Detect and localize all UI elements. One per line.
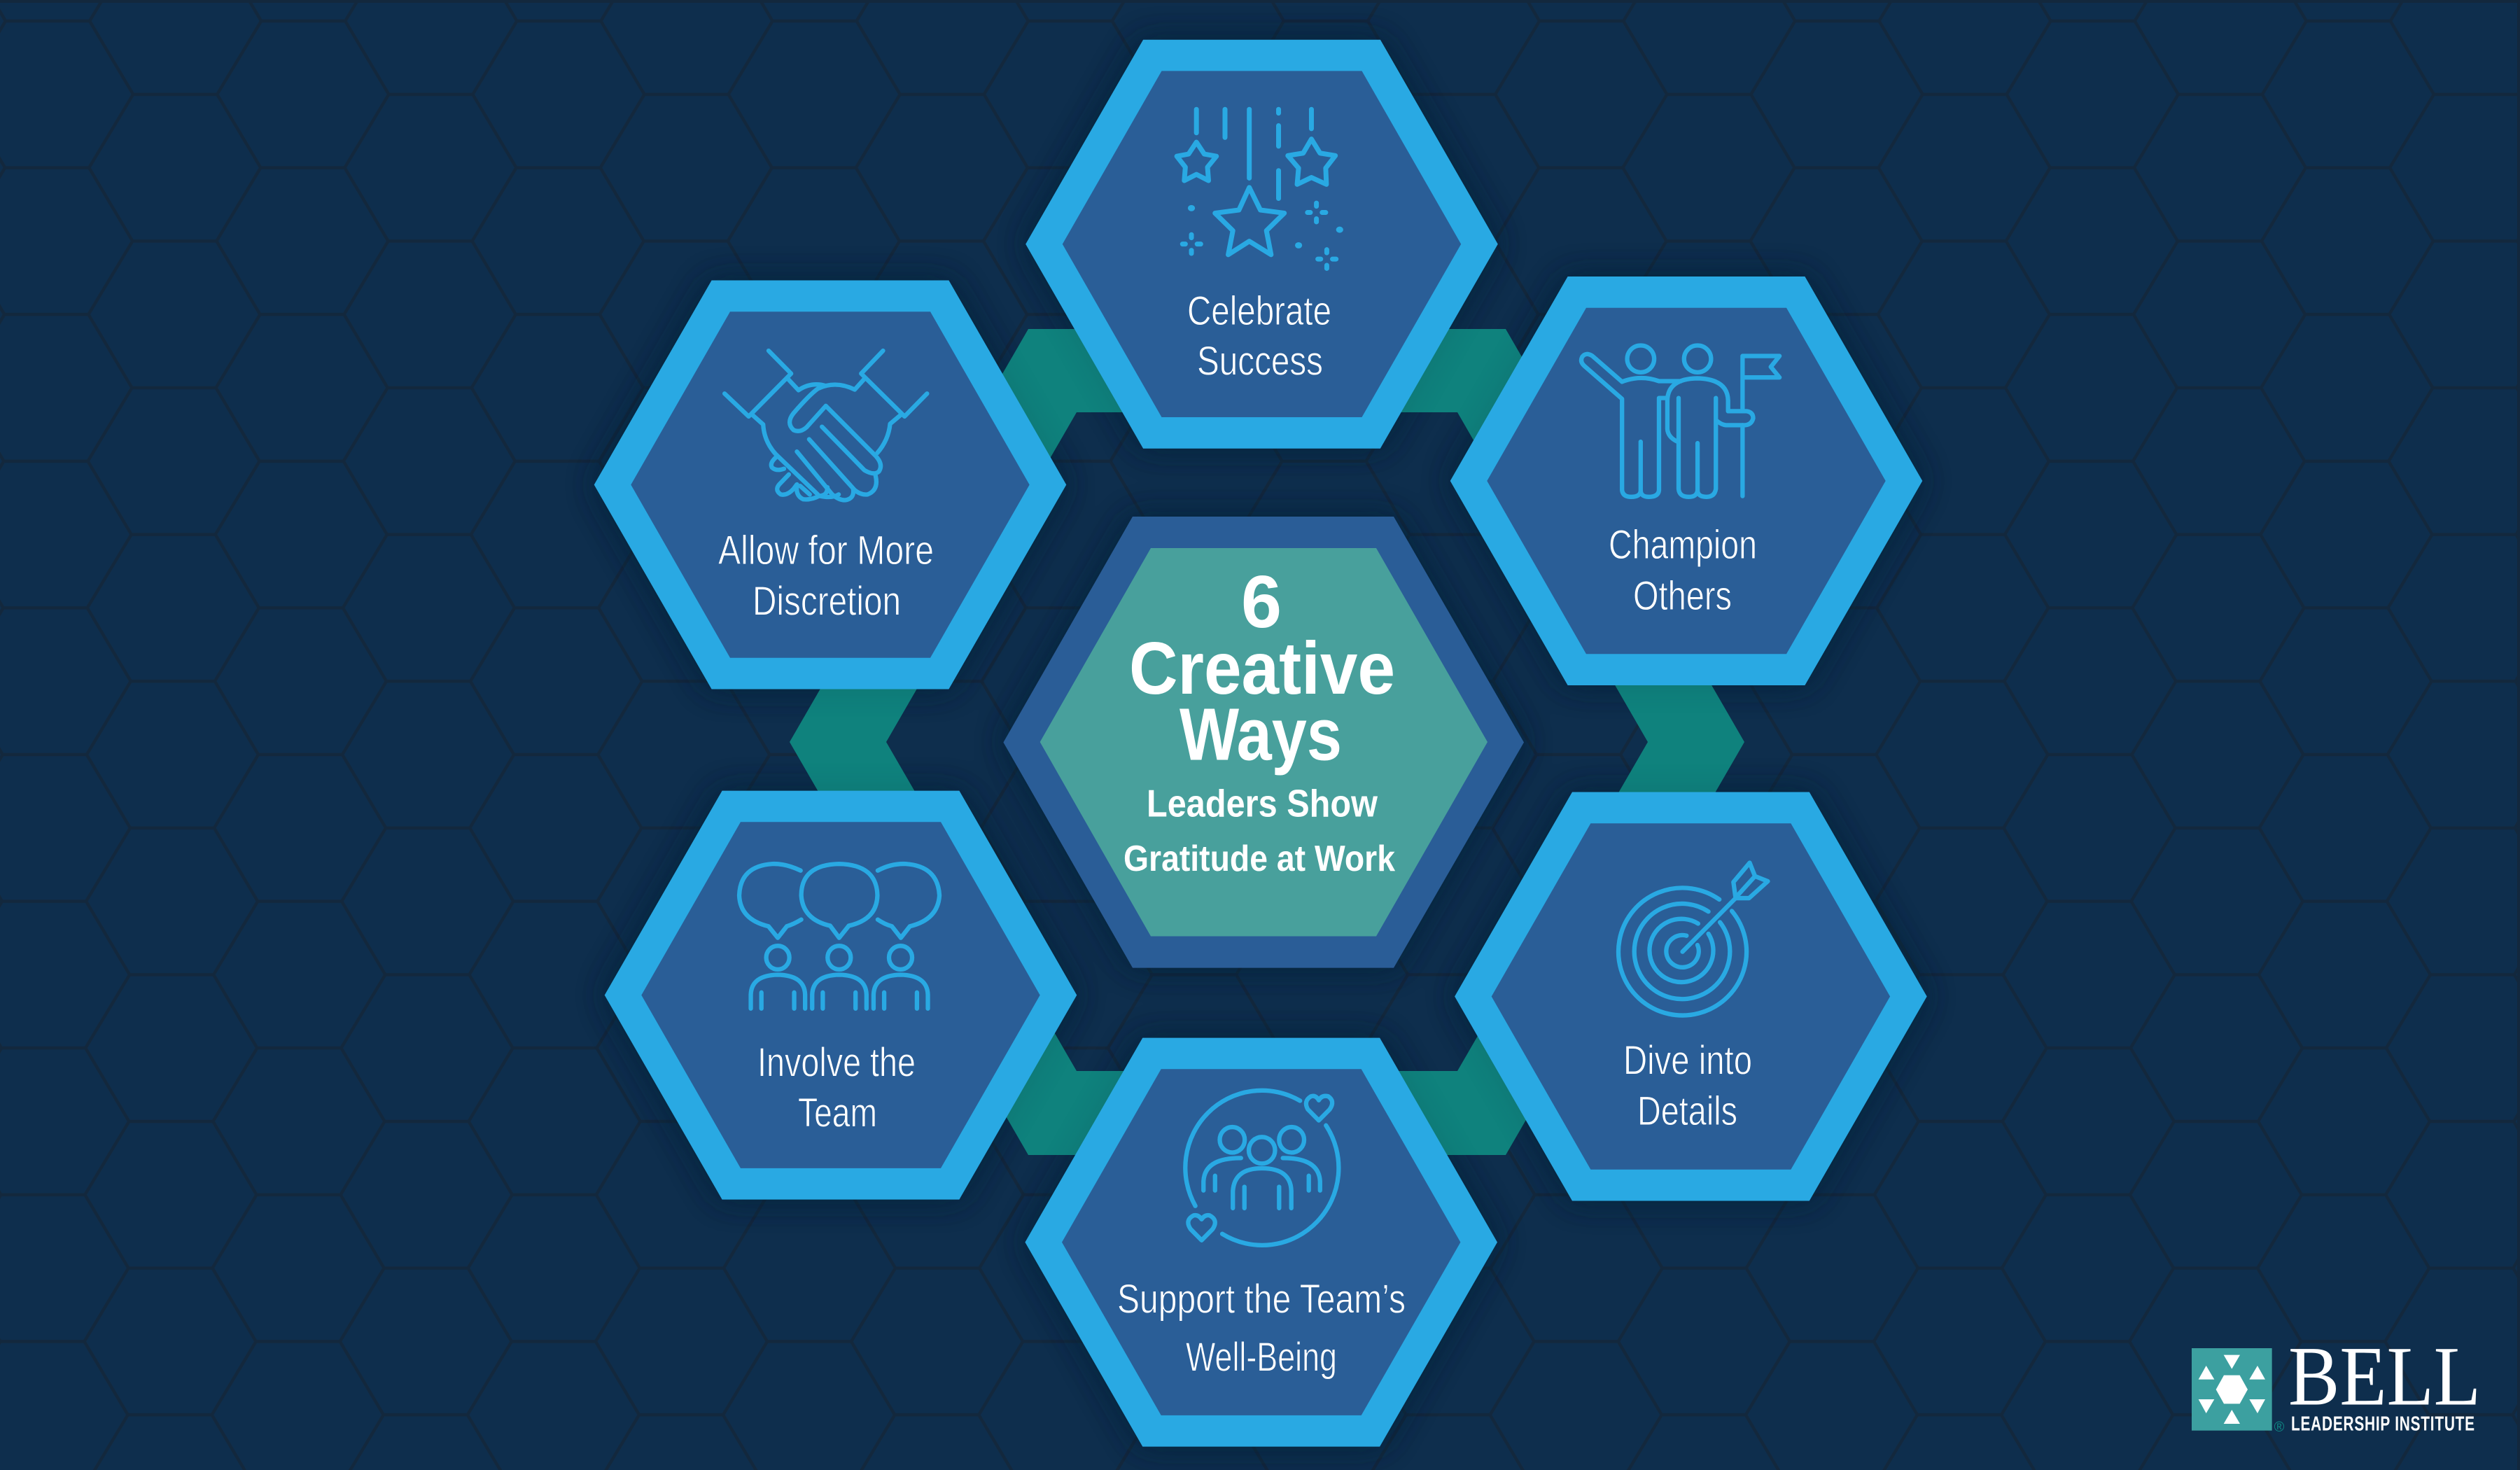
icon: team with speech bubbles [739,864,939,1009]
label: Others [1633,573,1732,619]
panel: support the team's well-being [1025,1038,1497,1447]
panel: allow for more discretion [594,280,1066,689]
panel: involve the team [605,791,1077,1200]
logo: Bell Leadership Institute [2192,1330,2481,1435]
panel: center title hexagon [1003,517,1524,968]
logo registered mark: ® [2274,1420,2285,1435]
label: Allow for More [718,528,934,573]
title: Ways [1180,694,1342,776]
logo wordmark: BELL [2288,1330,2481,1424]
icon: falling stars [1177,109,1343,268]
title: Gratitude at Work [1124,839,1395,879]
panel: champion others [1450,276,1922,685]
icon: handshake [724,351,927,500]
icon: target with arrow [1618,863,1768,1016]
title: Creative [1129,627,1395,710]
title: Leaders Show [1147,782,1378,825]
icon: two people with flag [1581,345,1779,497]
label [718,528,934,624]
label: Dive into [1623,1037,1752,1084]
title [1124,561,1395,879]
logo tagline: LEADERSHIP INSTITUTE [2291,1413,2474,1435]
label: Team [798,1091,877,1135]
connecting teal hexagon ring [790,329,1744,1155]
icon: team in a circle with hearts [1185,1091,1338,1245]
label: Support the Team’s [1117,1276,1406,1322]
label: Details [1637,1088,1737,1134]
panel: dive into details [1455,792,1927,1201]
label [1117,1276,1406,1380]
label: Well-Being [1186,1334,1337,1380]
label: Success [1197,339,1323,384]
label: Champion [1609,522,1757,568]
label [757,1040,916,1135]
label: Discretion [752,579,901,624]
label [1609,522,1757,619]
label: Involve the [757,1040,916,1086]
title: 6 [1241,561,1282,643]
label [1187,288,1331,384]
panel: celebrate success [1026,40,1498,449]
logo mark [2192,1348,2272,1431]
label: Celebrate [1187,288,1331,334]
label [1623,1037,1752,1134]
